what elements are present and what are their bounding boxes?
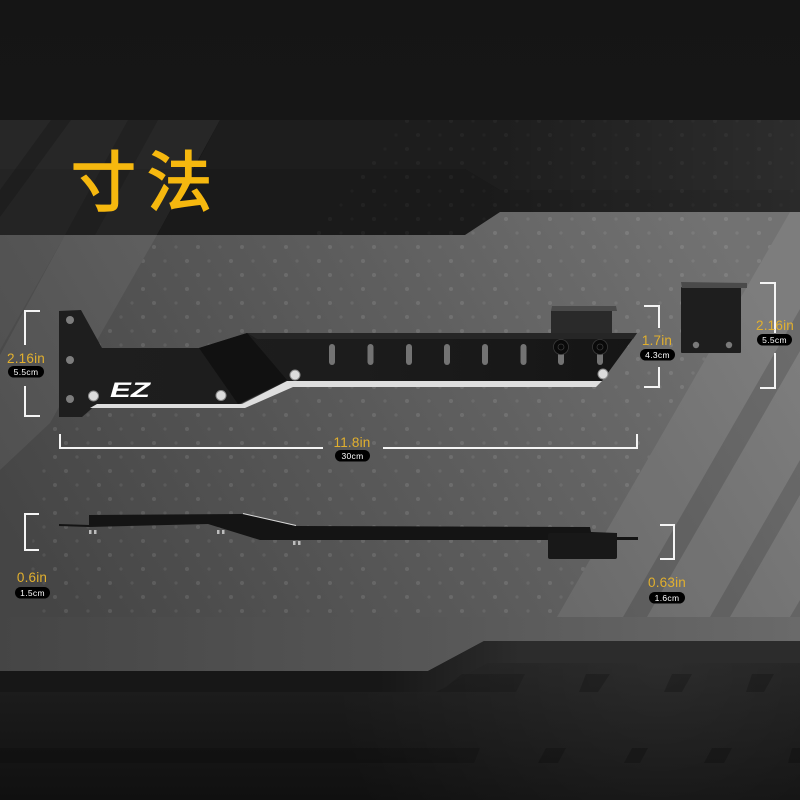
dimension: length 11.8in (60, 434, 637, 462)
end bracket: front view (681, 282, 747, 353)
black screws (554, 340, 608, 354)
background: upper band panel (0, 120, 800, 235)
white rivets (88, 369, 608, 401)
dimension: bracket height 2.16in: 2.16in (7, 351, 45, 366)
dimension: length 11.8in: 30cm (342, 451, 364, 461)
background: lower grey band (0, 617, 800, 671)
background: central grey panel (0, 212, 800, 617)
dimension: end bracket 2.16in: 5.5cm (762, 335, 787, 345)
dimension: bracket height 2.16in (7, 311, 45, 416)
background: lower dark chamfered band (0, 641, 800, 800)
dimension: thickness 0.6in: 1.5cm (20, 588, 45, 598)
left mounting holes (66, 316, 74, 403)
dimension: thickness 0.6in (15, 514, 50, 598)
top edge strip (247, 333, 637, 339)
dimension: thickness 0.6in: 0.6in (17, 570, 47, 585)
bevelled facet (199, 333, 287, 404)
slots (329, 344, 603, 365)
dimension: thickness 0.63in (648, 525, 686, 604)
EZ logo: EZ (110, 379, 152, 402)
dimension: end bracket 2.16in (756, 283, 794, 388)
dimension: thickness 0.63in: 1.6cm (655, 593, 679, 603)
dimension: bracket height 2.16in: 5.5cm (14, 367, 38, 377)
dimension: block height 1.7in: 1.7in (642, 333, 672, 348)
white edge strip (90, 381, 602, 408)
bracket body (59, 310, 637, 417)
main bracket: top view (59, 306, 637, 417)
title: 寸法 (71, 146, 223, 219)
dimension: end bracket 2.16in: 2.16in (756, 318, 794, 333)
dimension: length 11.8in: 11.8in (334, 435, 370, 450)
dimension: block height 1.7in: 4.3cm (645, 350, 670, 360)
dimension: thickness 0.63in: 0.63in (648, 575, 686, 590)
top mounting block (551, 306, 617, 335)
dimension: block height 1.7in (640, 306, 675, 387)
side view of bracket (59, 514, 638, 559)
